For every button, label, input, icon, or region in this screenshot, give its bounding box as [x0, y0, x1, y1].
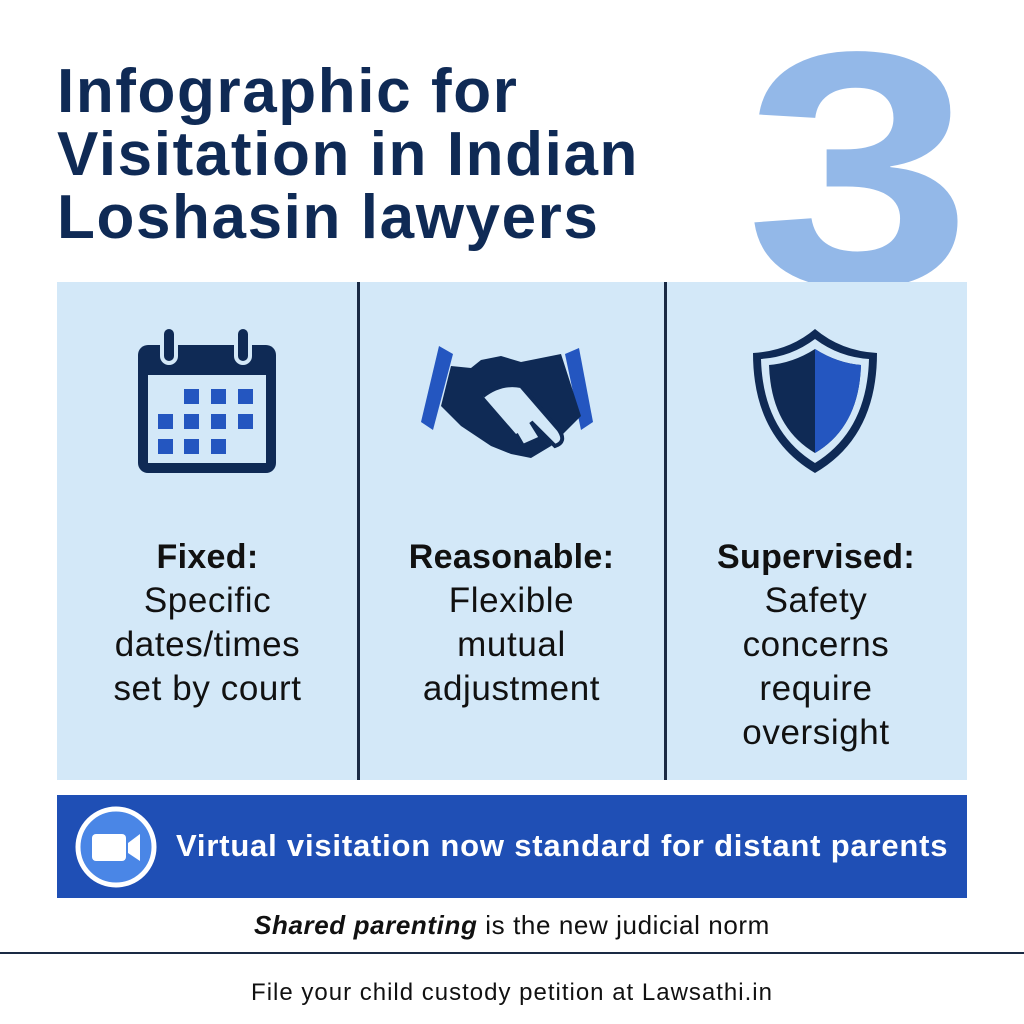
text: supervised: Supervised: [717, 538, 915, 576]
text: reasonable: adjustment [423, 669, 600, 708]
text: supervised [717, 538, 915, 752]
footer: File your child custody petition at Lawsathi.in [251, 979, 773, 1006]
column: reasonable [409, 346, 614, 708]
column: supervised [717, 329, 915, 752]
text: supervised: concerns [743, 625, 889, 664]
title: Visitation in Indian [57, 120, 639, 189]
text: fixed: Fixed: [157, 538, 258, 576]
icon: video camera [76, 806, 156, 888]
panel: visitation types [57, 282, 967, 780]
column: fixed [113, 329, 302, 708]
text: supervised: require [759, 669, 873, 708]
title: Loshasin lawyers [57, 183, 600, 252]
title [57, 57, 639, 252]
text: fixed: Specific [144, 581, 271, 620]
text: fixed: dates/times [115, 625, 300, 664]
icon: calendar [138, 329, 276, 473]
text: fixed: set by court [113, 669, 302, 708]
icon: handshake [421, 346, 593, 458]
text: reasonable: Flexible [449, 581, 574, 620]
icon: shield [753, 329, 877, 473]
text: reasonable: mutual [457, 625, 566, 664]
banner text: Virtual visitation now standard for distant parents [176, 828, 948, 863]
text: supervised: Safety [765, 581, 867, 620]
text: reasonable: Reasonable: [409, 538, 614, 576]
text: fixed [113, 538, 302, 708]
tagline: Shared parenting is the new judicial norm [254, 910, 770, 940]
banner: virtual visitation [57, 795, 967, 898]
text: supervised: oversight [742, 713, 890, 752]
title: Infographic for [57, 57, 518, 126]
text: reasonable [409, 538, 614, 708]
